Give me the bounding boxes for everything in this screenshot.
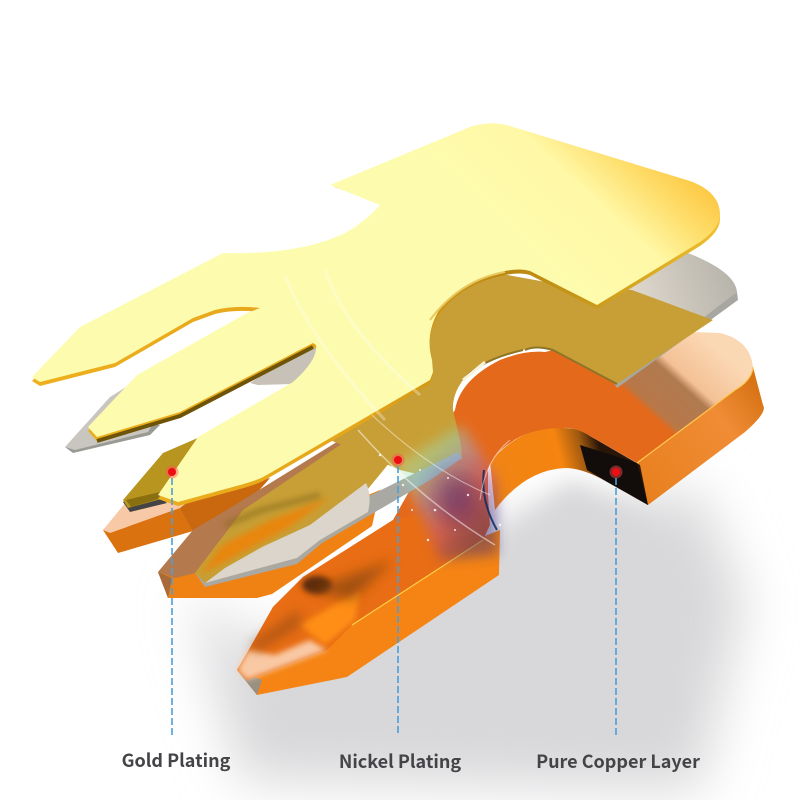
gold layer edge (32, 127, 720, 506)
callout: nickel plating: Nickel Plating (339, 748, 461, 774)
nickel left finger, gold tinted (123, 382, 305, 512)
callout: gold plating: Gold Plating (122, 747, 231, 773)
notch edge cleanup (326, 184, 388, 212)
drop shadow on the background (190, 480, 745, 790)
nickel front finger (195, 445, 462, 587)
copper layer (103, 330, 764, 695)
callout: pure copper layer (536, 466, 700, 774)
nickel slot reflection (250, 340, 317, 385)
callout: pure copper layer: Pure Copper Layer (536, 748, 700, 774)
thin gold rim on copper (637, 367, 753, 463)
callout: gold plating (122, 466, 231, 773)
copper middle finger (158, 440, 380, 598)
faint light streaks on gold (285, 270, 420, 420)
nickel back finger (65, 372, 170, 453)
gold layer top face (32, 123, 720, 502)
slot cut-out edges (97, 347, 313, 441)
sparkle and prism glow (358, 415, 510, 560)
copper left finger (103, 453, 270, 553)
copper front finger reflections (237, 510, 483, 680)
gold layer (32, 123, 720, 506)
copper main body and front finger (237, 330, 764, 695)
black cut surface (580, 445, 648, 505)
nickel main body (330, 250, 738, 477)
nickel layer (65, 250, 738, 587)
callout: nickel plating (339, 454, 461, 774)
